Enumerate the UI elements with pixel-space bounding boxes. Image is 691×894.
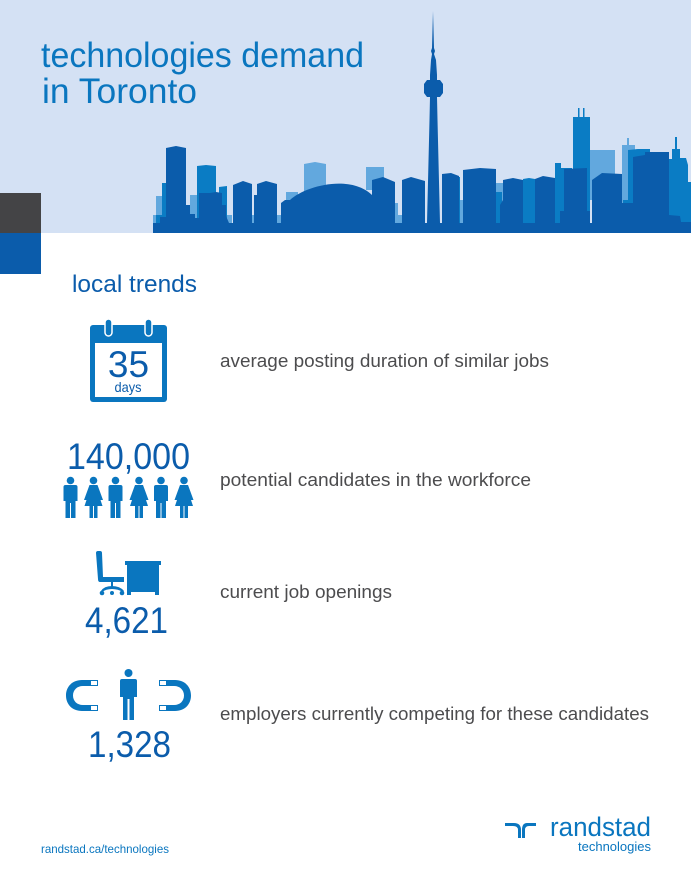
footer link: randstad.ca/technologies [41,842,169,856]
stat: posting duration [90,319,549,402]
label: current job openings [220,582,392,602]
icon: desk and chair [96,551,161,595]
stat: competing employers [66,669,649,765]
number: 35 days: 35 [108,344,149,385]
corner block: grey [0,193,41,233]
label: average posting duration of similar jobs [220,351,549,371]
number: 35 days: days [114,379,142,395]
title: in Toronto [42,72,197,111]
title [41,36,364,111]
header panel [0,0,691,233]
logo subtitle: technologies [578,840,651,854]
Toronto skyline [153,11,691,233]
icon: person between magnets [66,669,191,720]
heading: local trends: local trends [72,271,197,298]
stat: potential candidates [64,436,531,518]
number: 4,621: 4,621 [85,600,168,641]
logo wordmark: randstad [550,812,651,842]
number: 140,000: 140,000 [67,436,190,477]
corner block: blue [0,233,41,274]
label: employers currently competing for these candidates [220,704,649,724]
title: technologies demand [41,36,364,75]
icon: calendar [90,319,167,402]
number: 1,328: 1,328 [88,724,171,765]
stat: job openings [85,551,392,641]
label: potential candidates in the workforce [220,470,531,490]
randstad logo [505,812,651,854]
icon: row of people [64,477,194,518]
logo mark [505,823,536,838]
